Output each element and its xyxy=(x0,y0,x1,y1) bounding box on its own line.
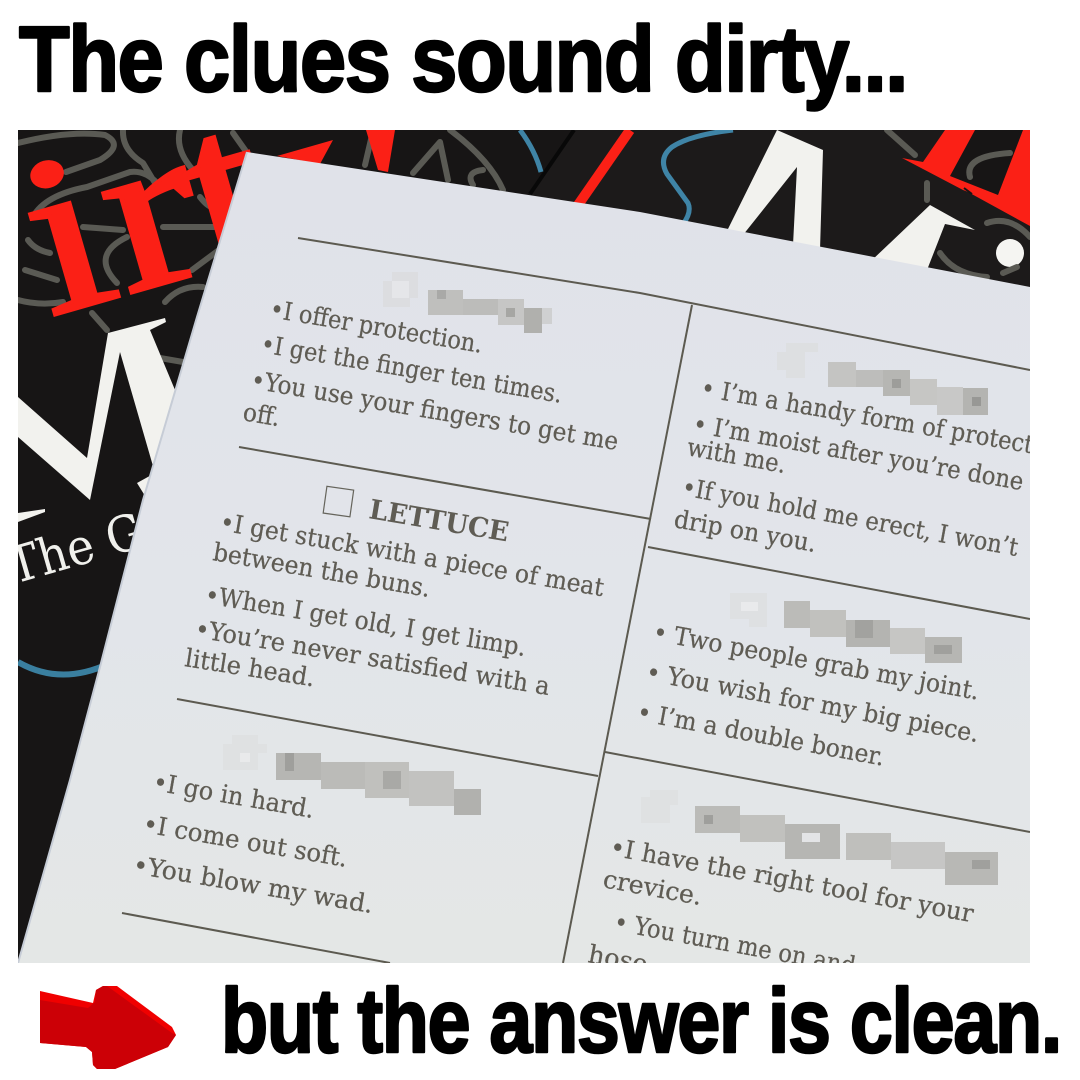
red letter fragments at top edge xyxy=(277,130,395,172)
clue block: middle right: • You wish for my big piece. xyxy=(644,657,981,748)
clue block: top right: •If you hold me erect, I won’t xyxy=(680,472,1021,562)
clue block: middle right xyxy=(641,626,976,766)
photo: game cards on book covers xyxy=(18,130,1030,963)
clue block: top right xyxy=(675,382,1030,556)
clue block: top right: drip on you. xyxy=(672,504,819,558)
answer heading: lettuce: LETTUCE xyxy=(367,494,511,548)
pixelated answer: top left xyxy=(383,272,552,333)
clue block: bottom left: •You blow my wad. xyxy=(131,850,375,919)
book cover artwork squiggles xyxy=(18,130,503,362)
clue block: bottom right: • You turn me on and xyxy=(612,907,858,981)
clue block: bottom left: •I come out soft. xyxy=(141,809,350,873)
clue block: lettuce xyxy=(183,507,606,701)
clue block: top left xyxy=(241,294,621,456)
clue block: top left: •I offer protection. xyxy=(268,294,485,359)
title: the clues sound dirty: The clues sound dirty... xyxy=(19,7,907,111)
clue block: lettuce: between the buns. xyxy=(211,537,433,603)
clue block: bottom right: •I have the right tool for your xyxy=(608,832,976,928)
clue block: lettuce: •I get stuck with a piece of meat xyxy=(218,507,606,602)
clue block: bottom right xyxy=(588,840,974,963)
clue block: top left: •I get the finger ten times. xyxy=(259,329,565,409)
blue arc on cover xyxy=(18,662,108,675)
pixelated answer: bottom right xyxy=(695,806,998,885)
arrow icon: red arrow pointing right xyxy=(40,986,176,1069)
clue block: bottom right: hose xyxy=(586,939,650,979)
clue block: bottom left: •I go in hard. xyxy=(151,767,317,824)
blue curve on first cover xyxy=(520,130,541,172)
red cover title letters: irt xyxy=(0,56,299,363)
clue block: top right: • I’m moist after you’re done xyxy=(691,409,1026,496)
clue block: top left: off. xyxy=(241,397,282,432)
clue block: middle right: • Two people grab my joint. xyxy=(651,617,982,706)
pixelated answer: top right xyxy=(777,343,988,415)
second game box in the background xyxy=(528,130,1030,279)
clue block: lettuce: little head. xyxy=(183,643,317,692)
clue block: top right: with me. xyxy=(685,432,789,479)
clue block: middle right: • I’m a double boner. xyxy=(635,697,887,772)
clue block: bottom left xyxy=(137,774,370,913)
pixelated answer: middle right xyxy=(784,601,962,663)
white cover letter M xyxy=(18,318,175,500)
clue block: top left: •You use your fingers to get me xyxy=(249,365,621,456)
white serif fragment xyxy=(18,509,45,522)
clue block: lettuce: •You’re never satisfied with a xyxy=(193,614,552,701)
cover subtitle: The G xyxy=(1,502,150,596)
checkbox: lettuce xyxy=(323,486,354,517)
paper card xyxy=(18,152,1030,963)
clue block: lettuce: •When I get old, I get limp. xyxy=(203,580,528,662)
clue block: bottom right: crevice. xyxy=(601,864,705,911)
pixelated answer: lower left xyxy=(276,753,481,815)
grid rules of the card xyxy=(122,238,1030,963)
